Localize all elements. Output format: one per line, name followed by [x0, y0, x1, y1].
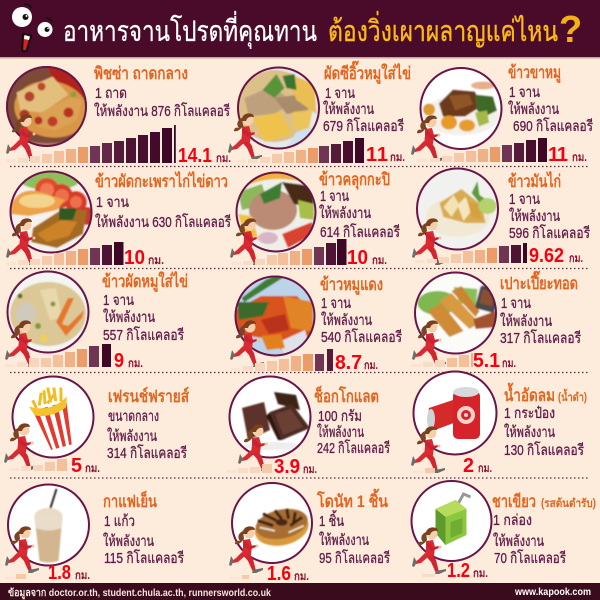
step bars [5, 574, 26, 579]
details: 614 กิโลแคลอรี [320, 223, 400, 241]
distance: กม. [502, 358, 516, 370]
details [107, 408, 187, 462]
details: 1 แก้ว [104, 513, 135, 530]
details: ให้พลังงาน 876 กิโลแคลอรี [94, 102, 230, 120]
distance: 3.9 [274, 456, 300, 478]
distance [463, 455, 492, 477]
heading: โดนัท 1 ชิ้น [316, 488, 388, 511]
runner [228, 113, 262, 160]
heading: ผัดซีอิ๊วหมูใส่ไข่ [324, 60, 411, 85]
details: 1 กระป๋อง [504, 405, 555, 422]
distance: กม. [128, 358, 143, 370]
details: 1 กล่อง [493, 512, 532, 529]
distance [347, 247, 387, 269]
header banner [0, 0, 600, 58]
icon: question mark: ? [559, 9, 582, 51]
details: 1 จาน [509, 84, 540, 101]
details [509, 191, 590, 242]
runner [5, 320, 39, 367]
panel: green tea [412, 481, 596, 582]
heading [504, 382, 587, 405]
distance: 11 [548, 144, 568, 166]
details: ให้พลังงาน [103, 532, 154, 550]
details: 1 จาน [501, 295, 531, 312]
details: ให้พลังงาน [509, 207, 560, 225]
step bars [418, 138, 547, 162]
details: 100 กรัม [318, 408, 362, 425]
distance: 9.62 [529, 245, 564, 267]
heading: เฟรนช์ฟรายส์ [108, 386, 189, 406]
step bars [422, 574, 435, 577]
distance: กม. [85, 463, 100, 475]
details: 317 กิโลแคลอรี [500, 329, 581, 347]
distance: กม. [572, 152, 587, 164]
runner [6, 218, 40, 265]
food photo: french fries [12, 376, 94, 458]
details: ให้พลังงาน [504, 423, 555, 441]
details [319, 510, 390, 567]
distance [447, 560, 488, 582]
food photo: chocolate [229, 376, 311, 458]
distance: 1.2 [447, 560, 470, 582]
distance: 10 [347, 247, 368, 269]
food photo: pork leg rice [419, 66, 503, 150]
heading: ข้าวคลุกกะปิ [319, 170, 390, 190]
details: ให้พลังงาน [500, 312, 552, 330]
food photo: red pork rice [233, 274, 317, 358]
panel: french fries [4, 376, 189, 477]
distance: 9 [114, 350, 124, 372]
food photo: shrimp paste rice [234, 170, 318, 254]
food photo: spring rolls [414, 271, 500, 355]
details: ให้พลังงาน [493, 532, 544, 550]
distance [335, 352, 378, 374]
distance: กม. [473, 568, 488, 580]
heading: ข้าวหมูแดง [320, 275, 383, 296]
details: ให้พลังงาน 630 กิโลแคลอรี [95, 213, 231, 231]
heading: ข้าวผัดหมูใส่ไข่ [102, 271, 188, 293]
icon: surprised face [12, 4, 52, 52]
source credits: ข้อมูลจาก doctor.or.th, student.chula.ac.th, runnersworld.co.uk [8, 587, 271, 600]
runner [6, 114, 40, 161]
food photo: soda cans [414, 372, 496, 454]
distance: กม. [294, 571, 309, 583]
heading: ชาเขียว [492, 491, 536, 511]
step bars [231, 239, 346, 265]
details: 314 กิโลแคลอรี [107, 444, 187, 462]
distance: กม. [364, 360, 378, 372]
details: 1 จาน [321, 295, 351, 312]
heading: กาแฟเย็น [103, 489, 157, 511]
details: 242 กิโลแคลอรี [317, 439, 390, 457]
distance [48, 562, 90, 584]
food photo: chicken rice [416, 167, 500, 251]
step bars [6, 242, 124, 265]
panel: iced coffee [5, 484, 184, 584]
heading: ช็อกโกแลต [314, 384, 379, 406]
distance: กม. [75, 570, 90, 582]
step bars [226, 464, 272, 473]
details: 1 จาน [509, 191, 540, 208]
step bars [230, 575, 249, 579]
distance: 2 [463, 455, 474, 477]
distance: 5 [71, 455, 82, 477]
details [321, 295, 402, 346]
details: ให้พลังงาน [508, 100, 559, 118]
distance: กม. [148, 255, 164, 267]
details [94, 85, 230, 120]
site url: www.kapook.com [514, 587, 591, 598]
details: ให้พลังงาน [319, 204, 371, 222]
title: อาหารจานโปรดที่คุณทาน [63, 11, 317, 49]
distance: กม. [478, 463, 492, 475]
panel: spring rolls [411, 270, 581, 372]
details [323, 85, 404, 135]
details [504, 405, 584, 459]
heading: ข้าวขาหมู [508, 63, 561, 84]
details: 557 กิโลแคลอรี [103, 326, 184, 344]
distance [71, 455, 100, 477]
step bars [411, 353, 473, 367]
details [319, 188, 400, 241]
panel: fried rice [5, 270, 188, 372]
panel: donut [229, 483, 390, 585]
runner [229, 526, 263, 573]
details: 1 จาน [103, 292, 134, 309]
runner [238, 424, 272, 471]
panel: pork leg rice [411, 63, 593, 166]
heading note: (น้ำดำ) [558, 388, 587, 404]
details [103, 513, 184, 567]
step bars [5, 344, 111, 367]
distance: 1.8 [48, 562, 71, 584]
step bars [413, 468, 435, 473]
food photo: iced coffee [8, 484, 89, 566]
panel: chocolate [226, 376, 390, 478]
distance: กม. [372, 255, 387, 267]
distance: 1.6 [267, 563, 291, 585]
details: 1 จาน [320, 188, 349, 205]
panel: red pork rice [230, 274, 402, 374]
details: ให้พลังงาน [321, 311, 372, 329]
details: ขนาดกลาง [108, 408, 159, 425]
details: ให้พลังงาน [107, 427, 157, 445]
runner [412, 218, 446, 265]
details: 1 ถาด [95, 85, 127, 102]
runner [4, 423, 38, 470]
distance: กม. [390, 152, 405, 164]
distance: 11 [366, 144, 388, 166]
panel: shrimp paste rice [230, 170, 400, 269]
footer bar [0, 583, 600, 600]
details: ให้พลังงาน [317, 423, 364, 441]
details [95, 194, 231, 231]
food photo: donut [232, 483, 312, 563]
distance: กม. [216, 153, 231, 165]
details [493, 512, 566, 567]
details: ให้พลังงาน [323, 100, 374, 118]
details: 1 จาน [325, 85, 355, 102]
runner [411, 115, 445, 162]
panel: soft drink [411, 372, 587, 477]
details: 679 กิโลแคลอรี [323, 117, 404, 135]
details [317, 408, 390, 457]
details [103, 292, 184, 344]
distance [114, 350, 143, 372]
details: 95 กิโลแคลอรี [319, 549, 390, 567]
food photo: fried rice [6, 270, 90, 354]
step bars [231, 349, 333, 371]
details: ให้พลังงาน [103, 308, 155, 326]
step bars [415, 243, 527, 263]
details: 70 กิโลแคลอรี [494, 549, 566, 567]
details: 115 กิโลแคลอรี [104, 549, 184, 567]
food photo: green tea box [412, 481, 492, 561]
distance: กม. [303, 464, 317, 476]
distance [274, 456, 317, 478]
panel: pizza [4, 64, 231, 167]
details: ให้พลังงาน [319, 531, 369, 549]
details: 1 ชิ้น [319, 510, 344, 530]
food photo: pad see ew [236, 66, 320, 150]
heading: ข้าวมันไก่ [508, 171, 561, 191]
runner [412, 527, 446, 574]
heading: ข้าวผัดกะเพราไก่ไข่ดาว [95, 171, 228, 191]
distance: กม. [569, 253, 583, 265]
details: 540 กิโลแคลอรี [321, 328, 402, 346]
panel: pad see ew [228, 60, 411, 166]
heading: น้ำอัดลม [504, 382, 555, 405]
runner [5, 526, 39, 573]
heading [492, 491, 596, 511]
runner [412, 320, 446, 367]
runner [230, 218, 264, 265]
distance [366, 144, 405, 166]
details [500, 295, 581, 347]
distance: 14.1 [178, 145, 212, 167]
details: 1 จาน [96, 194, 129, 211]
distance: 5.1 [473, 350, 500, 372]
heading: พิชซ่า ถาดกลาง [94, 64, 188, 83]
distance [473, 350, 516, 372]
distance [124, 247, 164, 269]
runner [411, 426, 445, 473]
distance [548, 144, 587, 166]
panel: basil rice with fried egg [6, 170, 231, 269]
distance [267, 563, 309, 585]
details [508, 84, 593, 135]
food photo: pizza [6, 66, 87, 147]
food photo: basil rice [9, 170, 96, 254]
runner [230, 320, 264, 367]
distance: 10 [124, 247, 145, 269]
step bars [6, 125, 176, 163]
step bars [236, 138, 364, 163]
panel: chicken rice [412, 167, 590, 267]
distance: 8.7 [335, 352, 362, 374]
step bars [9, 459, 67, 471]
